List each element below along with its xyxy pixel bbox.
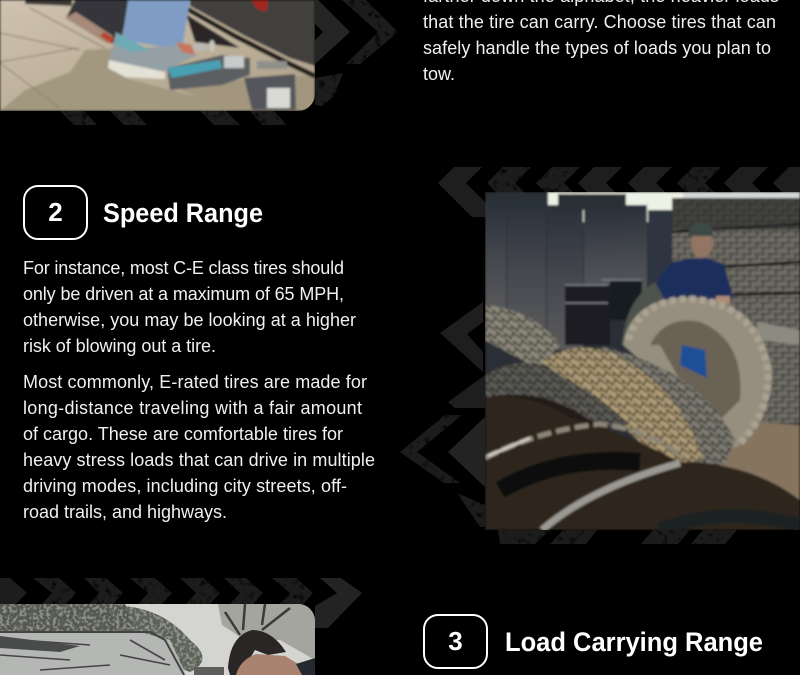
trees: [0, 604, 140, 632]
left grey tire: [485, 305, 560, 370]
text block: speed range paragraph 2: road trails, and highways.: [23, 502, 227, 522]
car: [0, 632, 186, 675]
rear shoe: [66, 0, 130, 44]
number badge 3: 3: [448, 626, 463, 656]
dark car underside: [190, 0, 315, 66]
grey tire behind tan: [590, 347, 735, 465]
body text: end of section 1: safely handle the types of loads you plan to: [423, 38, 771, 58]
chevrons: around tire photo: [400, 167, 800, 544]
ground: [720, 420, 800, 500]
sockets: [192, 43, 208, 51]
tan tire: [542, 348, 703, 465]
wrench: [167, 55, 250, 90]
body text: end of section 1: that the tire can carry. Choose tires that can: [423, 12, 776, 32]
text block: speed range paragraph 1: otherwise, you may be looking at a higher: [23, 310, 356, 330]
jeans: [122, 0, 190, 50]
photo: mechanic's foot and impact wrench: [0, 0, 315, 111]
text block: speed range paragraph 2: long-distance traveling with a fair amount: [23, 398, 362, 418]
text block: speed range paragraph 1: [23, 258, 356, 356]
chevrons: top section: [60, 0, 398, 125]
stacked drums: [565, 285, 610, 345]
left tire stacks: [485, 214, 507, 309]
text block: speed range paragraph 1: risk of blowing out a tire.: [23, 336, 216, 356]
photo: man with truck tires: [485, 192, 800, 530]
photo: man inspecting car: [0, 604, 315, 675]
text block: speed range paragraph 2: [23, 372, 375, 522]
number badge 2: 2: [48, 197, 63, 227]
shoe: [108, 31, 198, 72]
mid grey tire: [485, 362, 630, 430]
heading: Speed Range: Speed Range: [103, 198, 263, 228]
number badge 3: [424, 615, 487, 668]
body text: end of section 1: tow.: [423, 64, 455, 84]
back dark tire: [622, 282, 665, 345]
text block: speed range paragraph 2: Most commonly, E-rated tires are made for: [23, 372, 367, 392]
dark sidewall tire: [489, 394, 606, 430]
text block: speed range paragraph 2: of cargo. These are comfortable tires for: [23, 424, 343, 444]
text block: speed range paragraph 1: For instance, most C-E class tires should: [23, 258, 344, 278]
front dark tire: [680, 460, 800, 530]
text block: speed range paragraph 1: only be driven at a maximum of 65 MPH,: [23, 284, 344, 304]
chevrons: above section 3 photo: [0, 578, 362, 628]
text block: speed range paragraph 2: driving modes, including city streets, off-: [23, 476, 347, 496]
text block: speed range paragraph 2: heavy stress loads that can drive in multiple: [23, 450, 375, 470]
number badge 2: [24, 186, 87, 239]
floor: [0, 0, 315, 111]
upright big tire: [623, 297, 772, 450]
man: [228, 630, 286, 675]
right tire wall: [672, 198, 800, 423]
body text: end of section 1: [423, 0, 779, 84]
heading: Load Carrying Range: Load Carrying Range: [505, 627, 763, 657]
man: [651, 258, 733, 302]
sky: [548, 192, 683, 222]
